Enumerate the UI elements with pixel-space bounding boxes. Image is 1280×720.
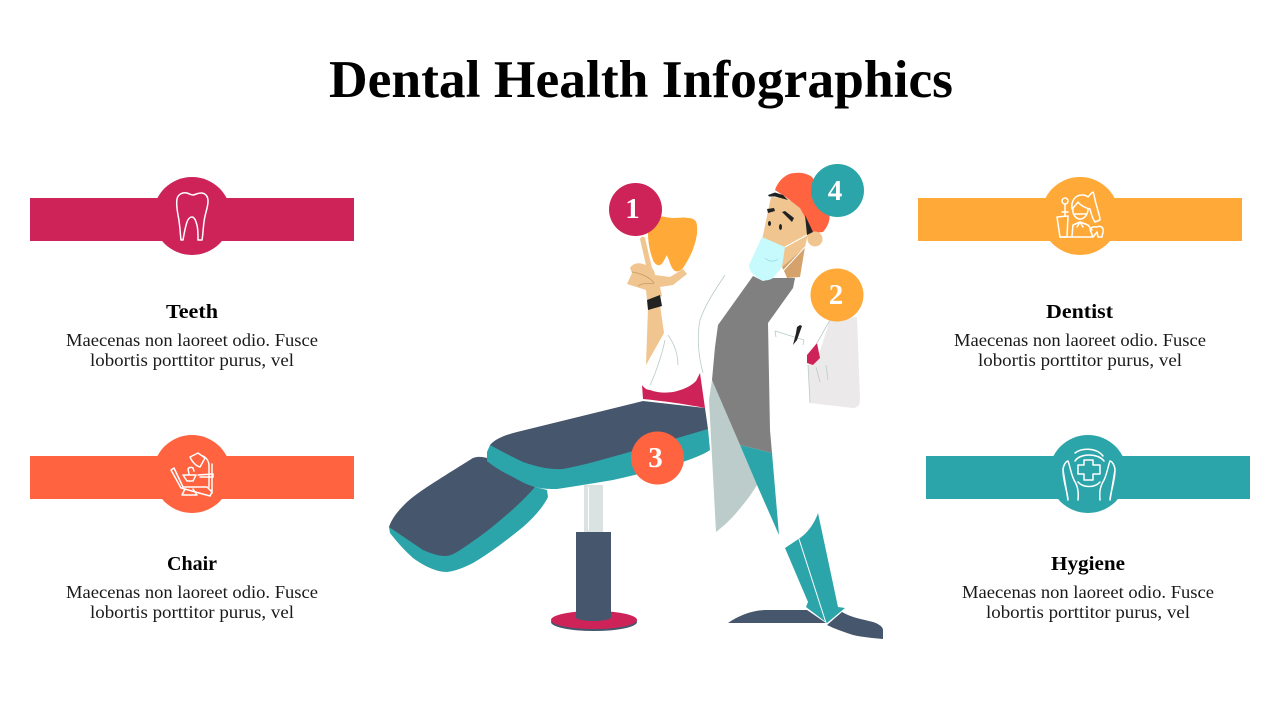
text: hygiene description: lobortis porttitor purus, vel	[986, 602, 1190, 622]
watch	[647, 295, 662, 310]
marker 2: 2	[829, 279, 843, 311]
icon: tooth	[177, 193, 208, 240]
icon: dental chair	[171, 453, 213, 496]
hat	[775, 173, 830, 233]
coat inner	[709, 380, 757, 532]
finger lines	[632, 272, 654, 286]
panel: hygiene	[926, 435, 1250, 622]
coat lines	[650, 275, 830, 403]
trousers inner	[740, 445, 779, 535]
icon: hands and cross	[1063, 449, 1115, 500]
chair leg rest	[389, 457, 548, 572]
pocket square	[807, 343, 820, 365]
hair	[768, 192, 813, 235]
mask	[749, 235, 807, 280]
pen in pocket	[793, 325, 802, 345]
marker 1: 1	[625, 193, 640, 225]
banner: chair	[30, 435, 354, 513]
trouser leg	[785, 513, 845, 623]
text: teeth description: Maecenas non laoreet odio. Fusce	[66, 330, 318, 350]
marker 4	[811, 164, 864, 217]
shirt	[642, 373, 705, 408]
marker 1	[609, 183, 662, 236]
icon: dentist	[1057, 192, 1103, 237]
heading: teeth: Teeth	[166, 301, 218, 323]
banner: hygiene	[926, 435, 1250, 513]
face	[762, 197, 813, 267]
text: hygiene description	[962, 582, 1214, 622]
heading: hygiene: Hygiene	[1051, 553, 1125, 575]
text: dentist description	[954, 330, 1206, 370]
chair column	[551, 485, 637, 631]
text: chair description: Maecenas non laoreet odio. Fusce	[66, 582, 318, 602]
arm and hand	[627, 237, 687, 365]
eyes and brows	[767, 208, 794, 230]
illustration: dentist	[627, 173, 883, 639]
panel: dentist	[918, 177, 1242, 370]
marker 2	[810, 268, 864, 322]
marker 3: 3	[648, 442, 663, 474]
neck	[782, 247, 805, 278]
text: chair description: lobortis porttitor purus, vel	[90, 602, 294, 622]
text: dentist description: Maecenas non laoreet odio. Fusce	[954, 330, 1206, 350]
banner: dentist	[918, 177, 1242, 255]
text: chair description	[66, 582, 318, 622]
marker 4: 4	[828, 175, 842, 207]
text: dentist description: lobortis porttitor purus, vel	[978, 350, 1182, 370]
orange tooth	[648, 216, 697, 271]
text: hygiene description: Maecenas non laoreet odio. Fusce	[962, 582, 1214, 602]
shoes	[728, 610, 883, 639]
panel: chair	[30, 435, 354, 622]
ear	[808, 232, 822, 246]
panel: teeth	[30, 177, 354, 370]
heading: chair: Chair	[167, 553, 217, 575]
coat sleeve	[808, 317, 860, 408]
marker 3	[631, 432, 684, 484]
grey scrub	[712, 276, 795, 453]
chair seat	[487, 401, 710, 489]
illustration: dental chair	[389, 401, 710, 631]
text: teeth description	[66, 330, 318, 370]
heading: dentist: Dentist	[1046, 301, 1113, 323]
title: Dental Health Infographics	[329, 51, 953, 109]
text: teeth description: lobortis porttitor purus, vel	[90, 350, 294, 370]
banner: teeth	[30, 177, 354, 255]
